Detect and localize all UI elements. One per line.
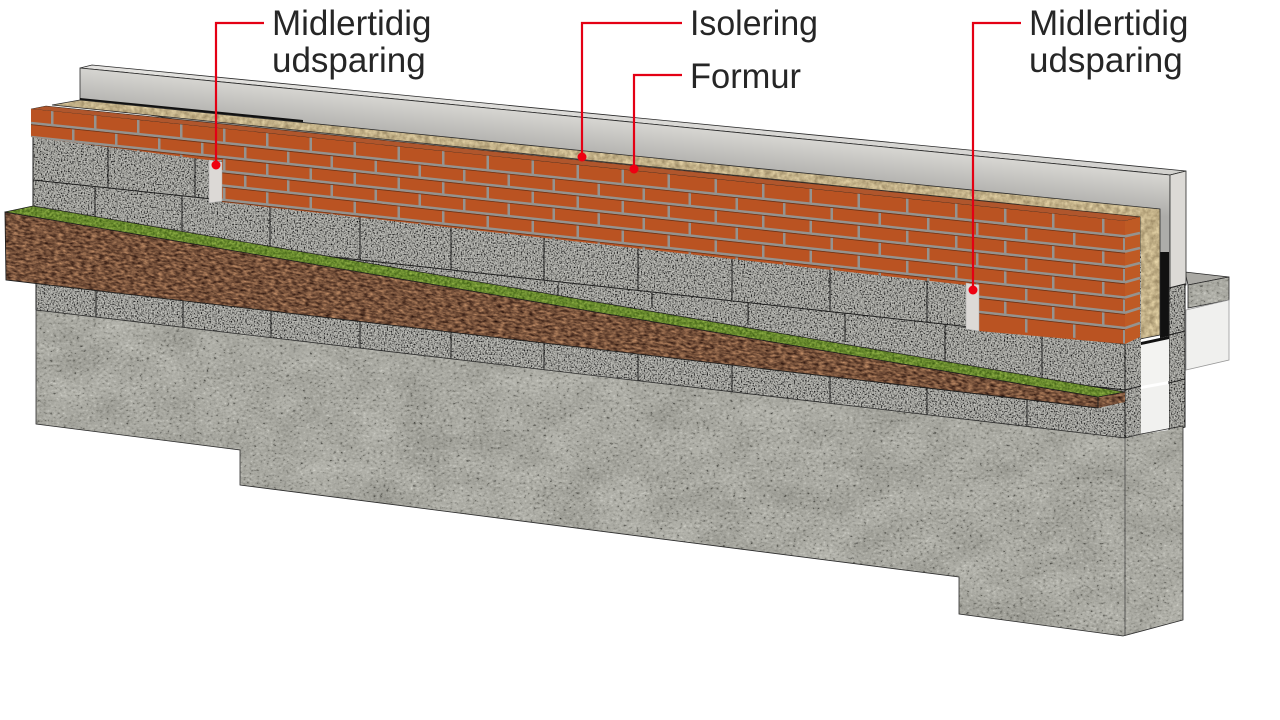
rear foundation block and insulation [1185,272,1231,370]
callout: Midlertidig udsparing left [212,4,432,170]
callout: Midlertidig udsparing right: Midlertidig [1029,4,1188,43]
callout: Midlertidig udsparing right [968,4,1188,294]
brick top face [31,106,1140,221]
block course and joint lines [33,137,1185,438]
insulation [50,98,1162,343]
back wall [80,65,1186,290]
callout: Isolering [578,4,818,162]
foam insulation at wall end [1141,336,1169,434]
callout: Formur: Formur [690,57,801,96]
callout: Midlertidig udsparing left: udsparing [272,41,426,80]
temporary recess left [209,160,222,203]
concrete block wall [30,135,1187,441]
facing brick wall [30,105,1140,350]
brick front face [30,105,1130,350]
grass [0,200,1130,405]
callout: Formur [630,57,801,174]
concrete foundation [34,308,1186,638]
callout: Midlertidig udsparing right: udsparing [1029,41,1183,80]
soil [4,212,1125,408]
brick end face [1125,217,1140,344]
temporary recess right [966,283,979,331]
callout: Isolering: Isolering [690,4,818,43]
black membrane strip [80,98,1169,338]
callout: Midlertidig udsparing left: Midlertidig [272,4,432,43]
